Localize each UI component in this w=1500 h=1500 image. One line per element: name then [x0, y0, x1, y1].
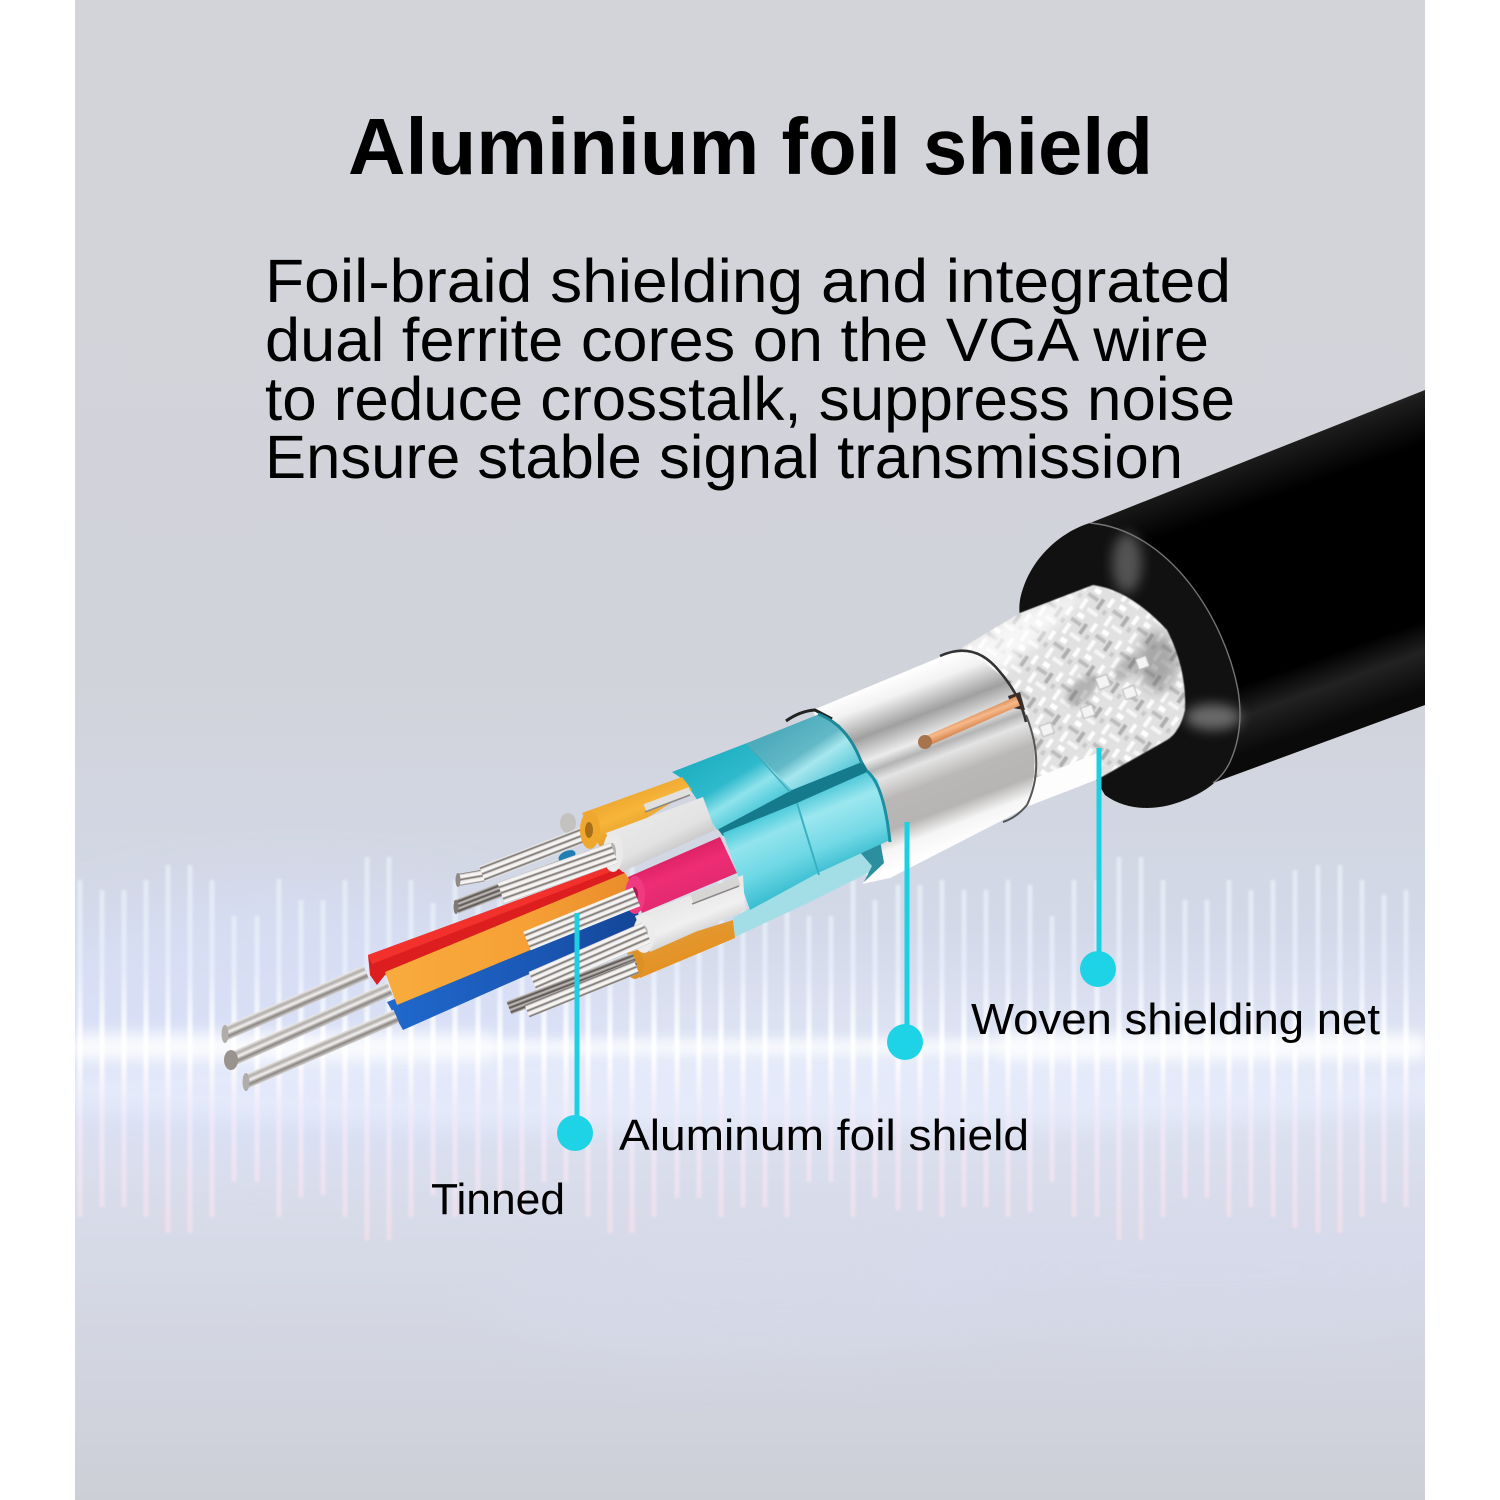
cable: silver strand bundles — [497, 843, 651, 1017]
cable: rear conductor strands — [453, 813, 595, 914]
cable: upper teal wrap — [672, 714, 862, 830]
cable: white lower wire — [633, 875, 745, 953]
cable: front conductors — [221, 966, 399, 1091]
label: woven shielding net: Woven shielding net — [971, 995, 1380, 1044]
cable: orange upper wire — [580, 777, 692, 849]
body text: Foil-braid shielding and integrated — [265, 247, 1231, 315]
body text: dual ferrite cores on the VGA wire — [265, 306, 1209, 374]
cable: black jacket — [1090, 390, 1425, 783]
cable: blue core — [387, 905, 640, 1030]
cable illustration — [221, 390, 1425, 1091]
cable: underside teal tape — [733, 840, 884, 937]
callout: braid leader — [1080, 748, 1116, 987]
cable: red core — [368, 865, 625, 985]
callout: tinned wire leader — [557, 913, 593, 1151]
cable: copper drain wire — [918, 692, 1025, 749]
sound wave bars — [75, 857, 1425, 1240]
label: aluminum foil shield: Aluminum foil shield — [619, 1111, 1029, 1160]
cable: white upper wire — [603, 791, 715, 872]
body text — [265, 247, 1235, 491]
cable: pink wire — [625, 837, 737, 914]
cable: aluminium foil tube — [813, 650, 1035, 880]
body text: to reduce crosstalk, suppress noise — [265, 365, 1235, 433]
body text: Ensure stable signal transmission — [265, 423, 1183, 491]
cable: white lower edge of tube — [862, 752, 1101, 884]
cable: lower teal wrap — [723, 771, 890, 910]
cable: orange lower wire — [626, 920, 735, 979]
cable: woven shielding braid — [958, 584, 1186, 792]
callout: foil leader — [887, 822, 923, 1060]
cable: jacket end face — [1019, 523, 1241, 808]
cable: gap between teal wraps — [717, 760, 870, 836]
label: tinned: Tinned — [431, 1175, 565, 1224]
title: Aluminium foil shield — [348, 102, 1153, 191]
cable: orange core — [385, 873, 640, 1005]
